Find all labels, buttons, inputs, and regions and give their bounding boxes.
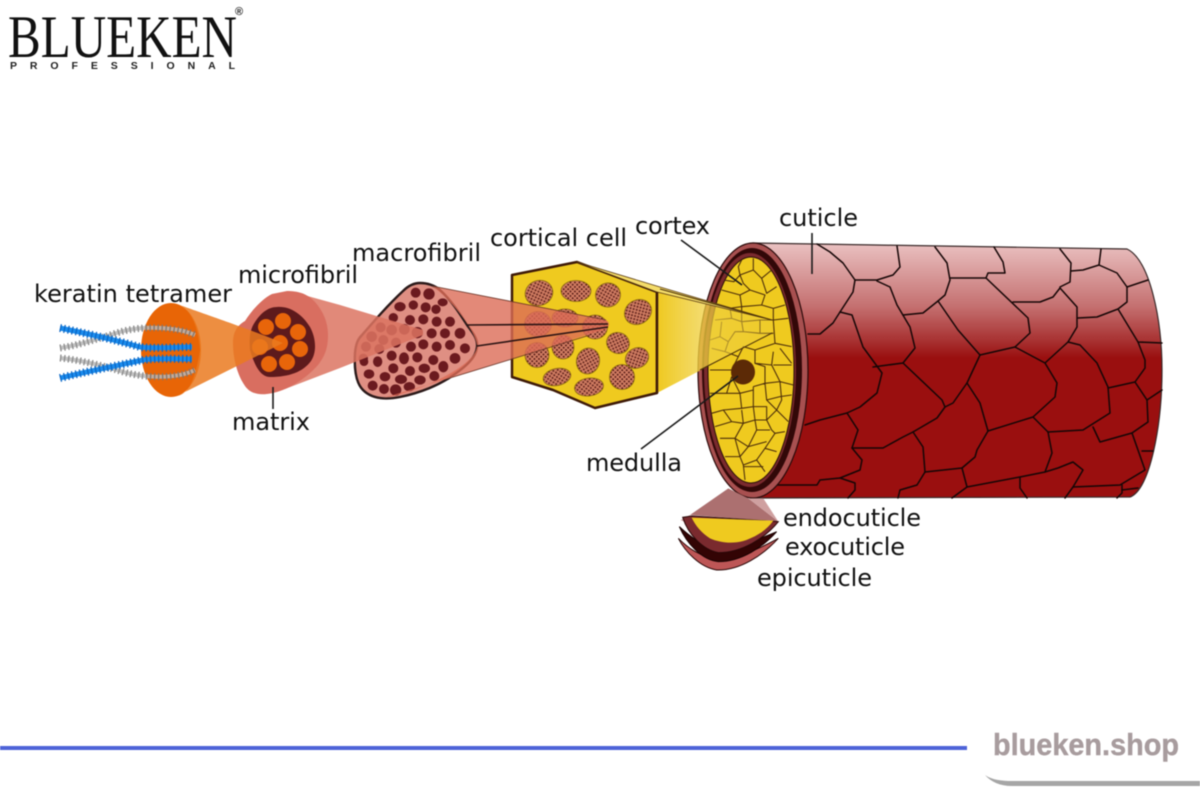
endocuticle ring xyxy=(704,253,796,487)
cortex yellow layer xyxy=(692,518,773,543)
macrofibril body xyxy=(355,283,477,399)
labels: matrix xyxy=(232,408,310,436)
footer rule xyxy=(0,746,967,750)
labels: cortex xyxy=(635,212,710,240)
cuticle scale lines xyxy=(777,244,1162,498)
labels: cuticle xyxy=(779,204,858,232)
keratin tetramer stage xyxy=(60,303,201,397)
cone: macrofibril to cortical cell xyxy=(383,286,609,398)
cone: cortical cell to cortex xyxy=(577,262,772,393)
endocuticle layer xyxy=(683,516,778,553)
cone: tetramer to microfibril xyxy=(177,304,283,396)
microfibril dots xyxy=(359,288,470,395)
macrofibril cross-sections xyxy=(522,276,656,398)
footer site name: blueken.shop xyxy=(993,727,1179,762)
labels: cortical cell xyxy=(490,224,627,252)
labels: epicuticle xyxy=(757,564,872,592)
macrofibril stage xyxy=(355,283,477,399)
cuticle layers detail xyxy=(678,488,778,570)
cortical cell hexagon xyxy=(512,262,657,408)
footer swoosh xyxy=(985,775,1200,786)
cone: microfibril to macrofibril xyxy=(285,292,423,389)
logo: Blueken Professional: ® xyxy=(235,6,243,18)
logo: Blueken Professional: BLUEKEN xyxy=(8,4,237,70)
cortex yellow xyxy=(708,257,794,483)
cell side face xyxy=(512,262,657,408)
leader lines xyxy=(273,233,812,449)
exocuticle layer xyxy=(679,527,777,562)
cross-section ellipse xyxy=(141,303,201,397)
labels: microfibril xyxy=(238,261,358,289)
microfibril matrix xyxy=(233,291,328,394)
hair shaft cylinder with cuticle scales xyxy=(753,243,1162,498)
protofilament circles xyxy=(252,313,308,372)
microfibril dark core xyxy=(250,307,315,377)
hair cross-section xyxy=(698,243,808,498)
blue helices xyxy=(60,328,192,378)
epicuticle ring xyxy=(698,243,808,498)
labels: macrofibril xyxy=(352,239,481,267)
labels: keratin tetramer xyxy=(34,280,232,308)
cortex cell network xyxy=(710,258,793,480)
logo: Blueken Professional: PROFESSIONAL xyxy=(10,60,236,72)
epicuticle layer xyxy=(678,538,778,570)
labels: endocuticle xyxy=(783,504,921,532)
microfibril stage xyxy=(233,291,328,394)
labels: medulla xyxy=(586,449,682,477)
grey helices xyxy=(60,328,195,377)
section wedge xyxy=(690,488,778,522)
medulla xyxy=(731,360,755,384)
labels: exocuticle xyxy=(785,533,905,561)
labels xyxy=(34,204,921,592)
exocuticle ring xyxy=(702,248,802,492)
cylinder body xyxy=(753,243,1162,498)
